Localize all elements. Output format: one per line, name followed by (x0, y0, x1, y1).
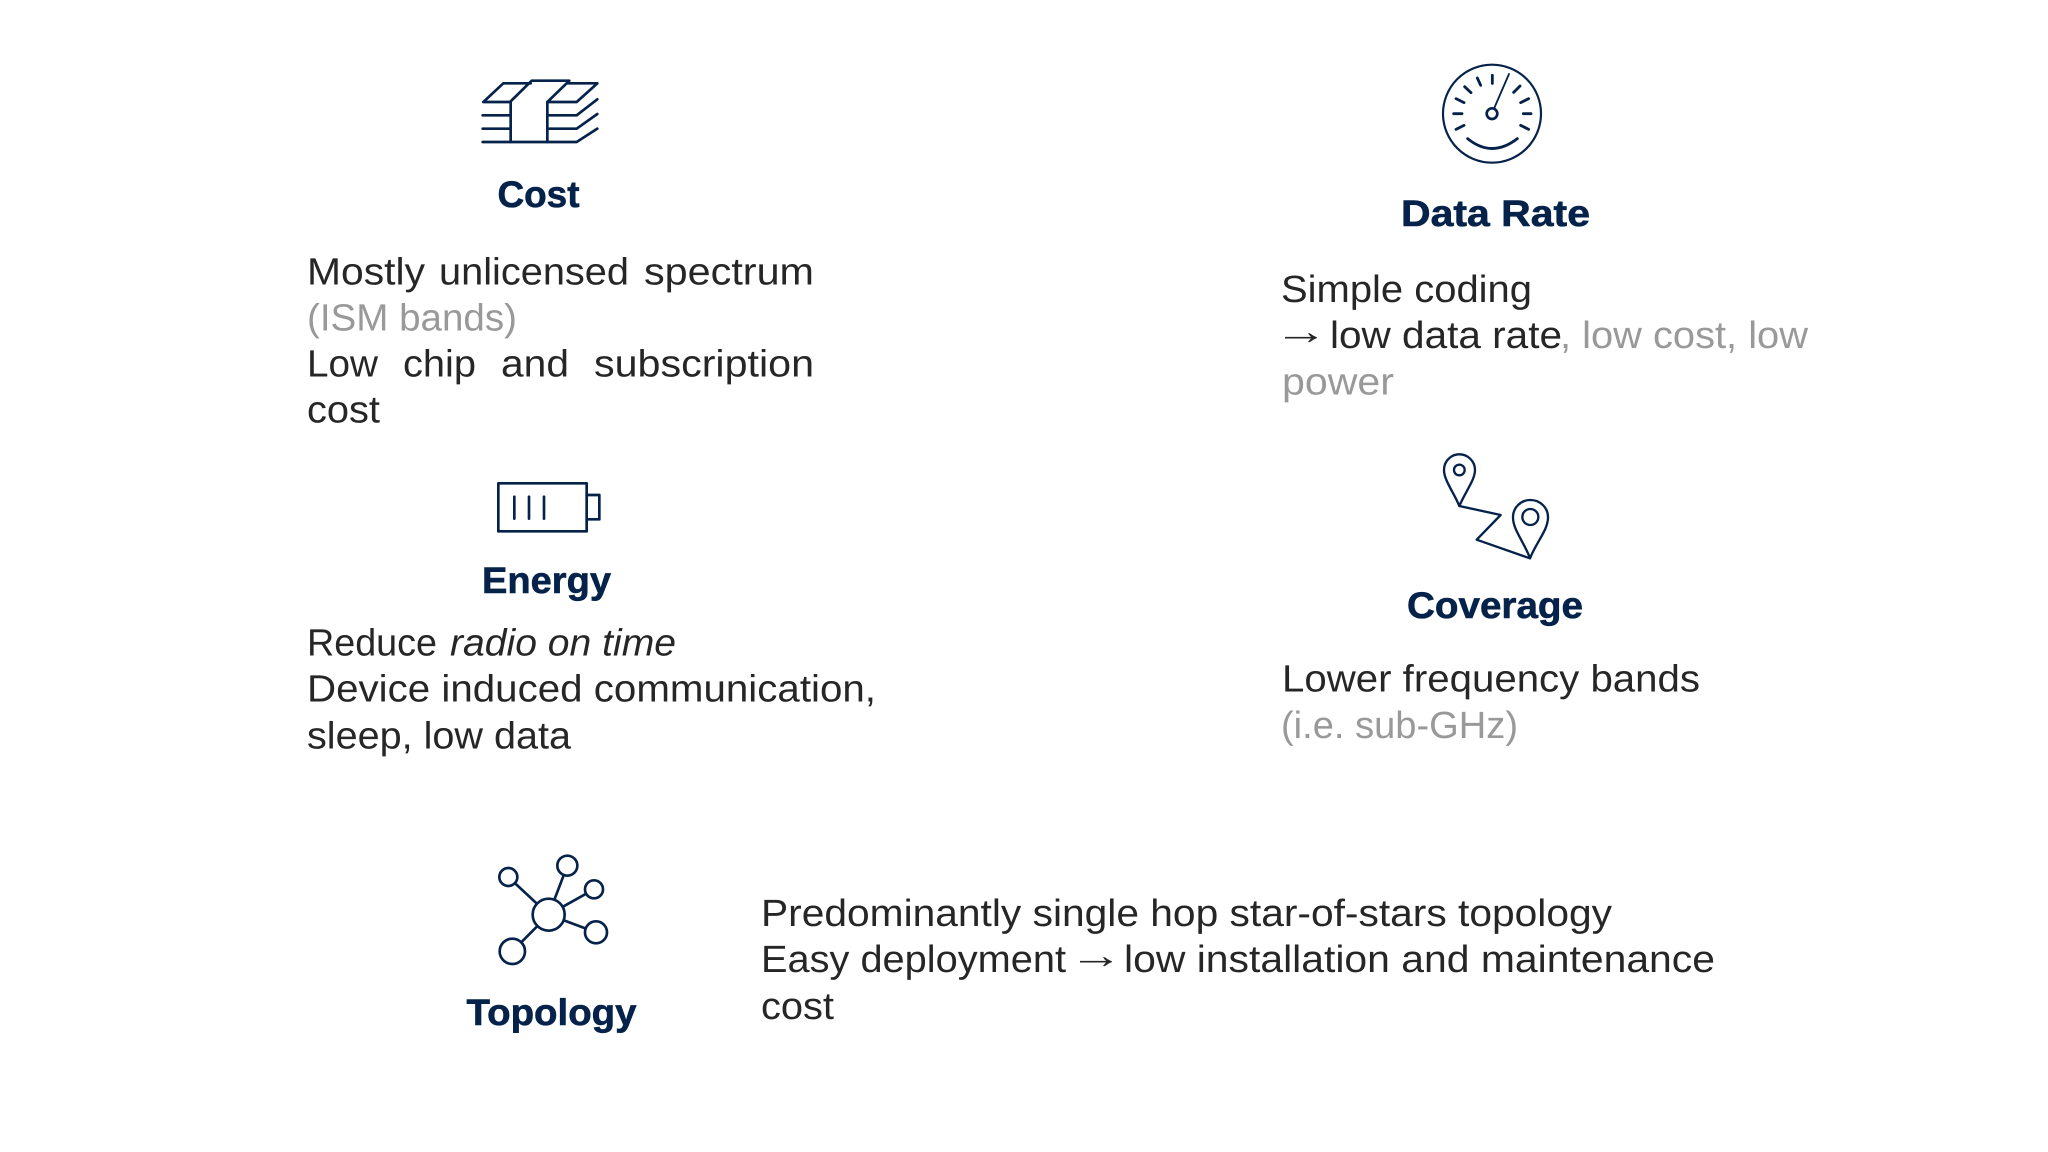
text block: coverage description: (i.e. sub-GHz) (1281, 705, 1518, 747)
text block: topology description: Easy deployment (761, 939, 1066, 981)
text block: cost description: spectrum (644, 252, 814, 294)
text block: coverage description: Lower frequency bands (1282, 658, 1700, 700)
heading: Data Rate: Data Rate (1401, 193, 1590, 234)
heading: Cost: Cost (498, 174, 580, 215)
text block: cost description: Low (307, 344, 379, 386)
text block: data rate description: → (1274, 311, 1328, 353)
text block: energy description: sleep, low data (307, 716, 572, 758)
panel: data rate (1274, 65, 1809, 404)
icon: stack of banknotes (483, 81, 597, 142)
text block: cost description: chip (403, 344, 476, 386)
text block: topology description (761, 893, 1715, 1028)
text block: energy description: Device induced communication, (307, 668, 876, 710)
text block: topology description: low installation and maintenance (1124, 939, 1715, 981)
text block: energy description: radio on time (450, 622, 676, 664)
text block: cost description: unlicensed (439, 252, 629, 294)
icon: star network (499, 856, 607, 964)
panel: cost (307, 81, 814, 432)
heading: Energy: Energy (482, 560, 611, 601)
icon: map pins with route (1444, 454, 1548, 558)
text block: energy description (307, 622, 876, 758)
text block: topology description: Predominantly single hop star-of-stars topology (761, 893, 1612, 935)
text block: cost description: cost (307, 390, 380, 432)
panel: energy (307, 483, 876, 758)
heading: Topology: Topology (466, 992, 637, 1033)
text block: energy description: Reduce (307, 622, 437, 664)
text block: data rate description (1274, 269, 1809, 404)
panel: coverage (1281, 454, 1700, 747)
text block: topology description: → (1069, 935, 1123, 977)
text block: coverage description (1281, 658, 1700, 747)
text block: data rate description: Simple coding (1281, 269, 1532, 311)
text block: data rate description: , low cost, low (1560, 315, 1809, 357)
icon: speedometer gauge (1443, 65, 1541, 163)
heading: Coverage: Coverage (1407, 585, 1583, 626)
text block: data rate description: power (1282, 362, 1394, 404)
text block: cost description: and (501, 344, 569, 386)
text block: cost description: Mostly (307, 252, 425, 294)
text block: cost description (307, 252, 814, 432)
text block: topology description: cost (761, 986, 834, 1028)
panel: topology (466, 856, 1715, 1033)
icon: battery (498, 483, 599, 531)
text block: cost description: (ISM bands) (307, 298, 517, 340)
text block: data rate description: low data rate (1330, 315, 1562, 357)
text block: cost description: subscription (594, 344, 814, 386)
